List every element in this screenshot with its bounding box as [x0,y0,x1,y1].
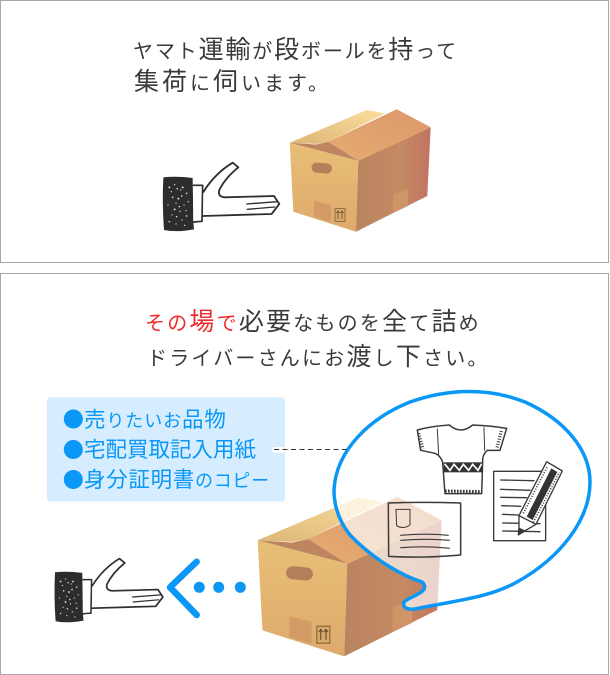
callout background: item list [47,398,285,502]
list item: ID copy: 身分証明書のコピー [84,468,270,492]
heading: step 1 line 1: ヤマト運輸が段ボールを持って [133,36,458,64]
arrow: dotted chevron pointing to hand [170,562,246,615]
icon: t-shirt [417,425,507,494]
heading: step 2 line 2: ドライバーさんにお渡し下さい。 [147,343,490,371]
connector: dashed line to bubble [272,447,350,453]
panel: step 1 frame [0,0,609,263]
illustration: hand receiving box, step 2 [55,559,163,622]
heading: step 2 line 1: その場で必要なものを全て詰め [145,308,481,336]
panel: step 2 frame [0,273,609,675]
list item: purchase form: 宅配買取記入用紙 [84,438,256,462]
icon: order form with pencil [494,462,562,541]
icon: postcard [388,502,461,557]
bullet markers [64,410,83,489]
illustration: hand reaching for box, step 1 [163,163,279,231]
list item: items to sell: 売りたいお品物 [84,408,227,432]
illustration: speech bubble [334,392,590,609]
illustration: open cardboard box, step 2 [258,497,442,656]
illustration: cardboard box, step 1 [290,109,431,232]
heading: step 1 line 2: 集荷に伺います。 [134,68,331,96]
